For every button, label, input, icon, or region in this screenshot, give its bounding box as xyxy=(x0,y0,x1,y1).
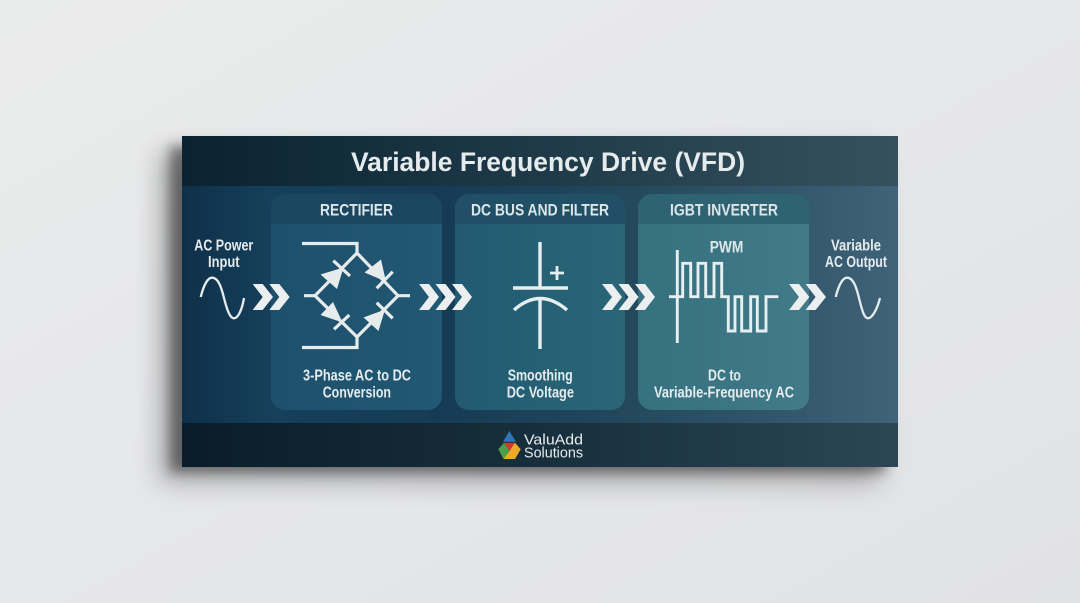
output label: Variable xyxy=(831,238,881,255)
label: PWM: PWM xyxy=(710,238,743,257)
footer bar xyxy=(182,423,898,467)
heading: rectifier: RECTIFIER xyxy=(320,200,393,220)
arrow: inverter to output xyxy=(789,284,826,310)
icon: capacitor xyxy=(513,242,568,349)
caption: rectifier: 3-Phase AC to DC xyxy=(303,368,411,385)
caption: inverter: Variable-Frequency AC xyxy=(654,384,794,401)
caption: DC bus: DC Voltage xyxy=(507,384,574,401)
logo mark xyxy=(498,431,521,459)
card shadow xyxy=(160,146,885,482)
caption: inverter xyxy=(654,368,794,401)
logo text xyxy=(524,431,583,462)
icon: PWM waveform xyxy=(669,250,778,343)
output label xyxy=(825,238,887,271)
logo text: ValuAdd xyxy=(524,431,583,448)
icon: output sine wave xyxy=(836,278,880,318)
panel: IGBT inverter xyxy=(638,194,809,410)
heading: IGBT inverter: IGBT INVERTER xyxy=(670,200,778,220)
panel: rectifier xyxy=(271,194,442,410)
caption: DC bus xyxy=(507,368,574,401)
caption: inverter: DC to xyxy=(708,368,741,385)
caption: rectifier xyxy=(303,368,411,401)
input label: AC Power xyxy=(194,238,253,255)
icon: bridge rectifier xyxy=(302,244,410,348)
arrow: DC bus to inverter xyxy=(602,284,655,310)
output label: AC Output xyxy=(825,254,887,271)
input label: Input xyxy=(208,254,240,271)
title bar xyxy=(182,136,898,186)
panel: main VFD card xyxy=(182,136,898,467)
title: Variable Frequency Drive (VFD) xyxy=(351,147,745,177)
arrow: input to rectifier xyxy=(253,284,290,310)
input label xyxy=(194,238,253,271)
heading: DC bus and filter: DC BUS AND FILTER xyxy=(471,200,609,220)
panel: DC bus and filter xyxy=(455,194,625,410)
icon: input sine wave xyxy=(201,278,244,318)
arrow: rectifier to DC bus xyxy=(419,284,472,310)
caption: rectifier: Conversion xyxy=(323,384,391,401)
logo text: Solutions xyxy=(524,445,583,462)
caption: DC bus: Smoothing xyxy=(508,368,573,385)
logo: ValuAdd Solutions xyxy=(498,431,583,462)
